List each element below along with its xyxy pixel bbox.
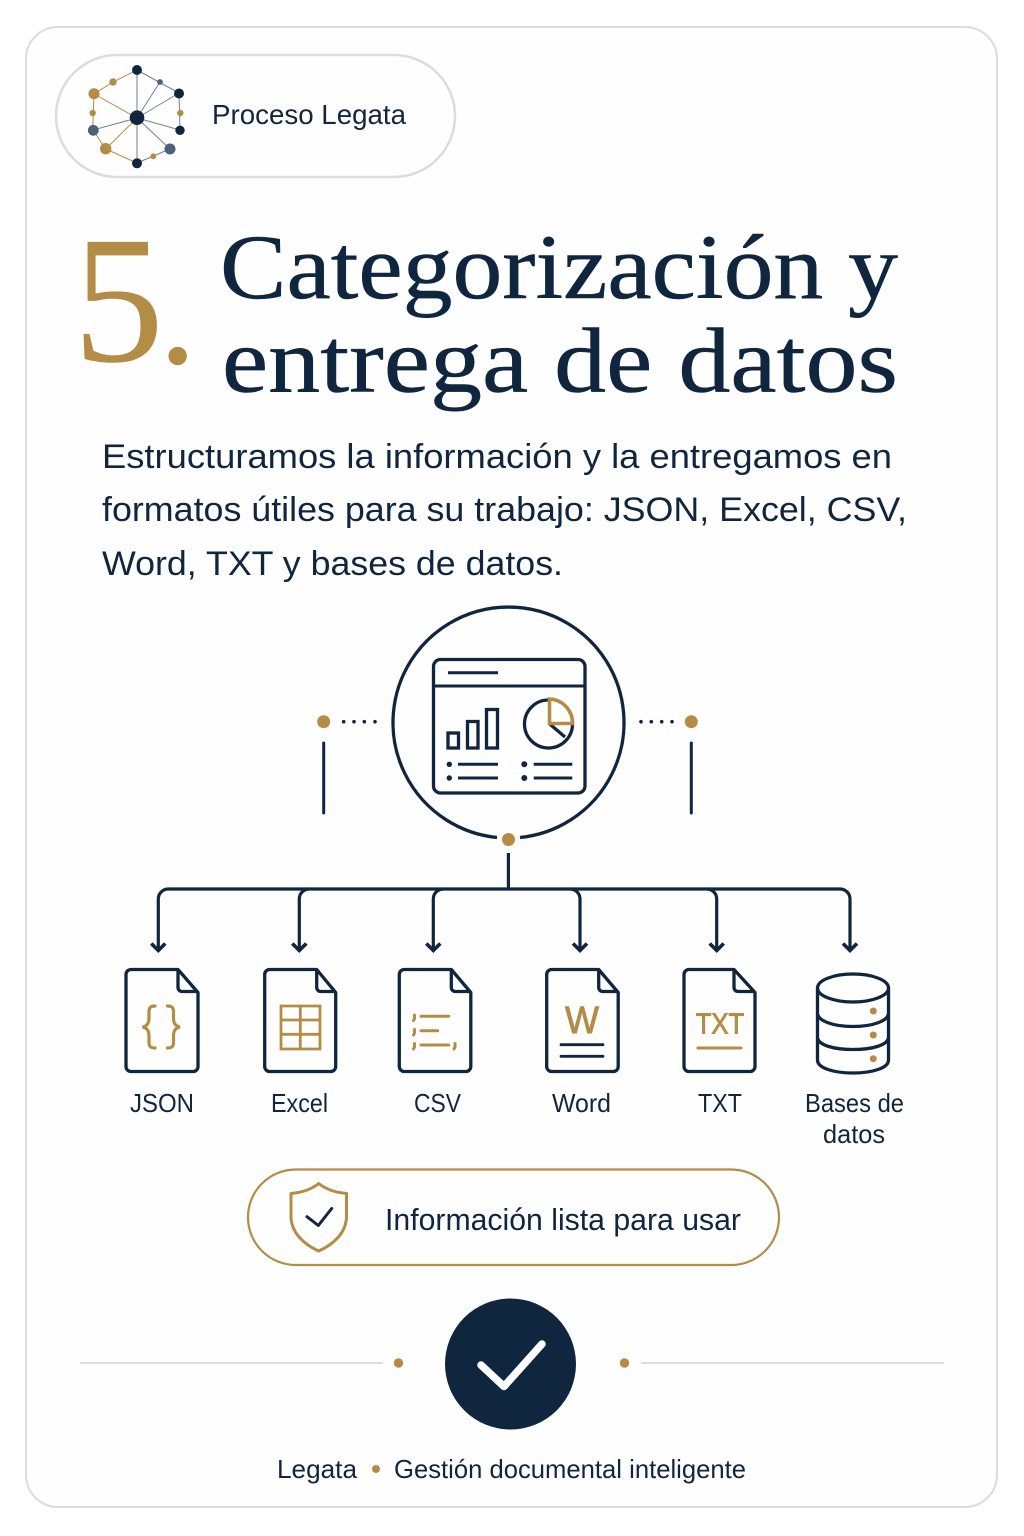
diagram: dashboard hub xyxy=(393,607,624,846)
title: Categorización y xyxy=(220,216,898,318)
icon: check badge xyxy=(445,1298,576,1430)
intro text xyxy=(102,438,907,583)
format: Word: Word xyxy=(552,1088,611,1118)
format: Excel xyxy=(265,970,336,1118)
title: entrega de datos xyxy=(222,310,898,412)
left connector xyxy=(317,715,377,813)
icon: shield check xyxy=(291,1184,346,1251)
format: Bases de datos xyxy=(805,974,904,1149)
arrows: branch to formats xyxy=(151,853,857,950)
circle outline xyxy=(393,607,624,838)
format: TXT: TXT xyxy=(698,1088,742,1118)
format: CSV xyxy=(399,970,471,1118)
badge text: Proceso Legata xyxy=(212,99,406,130)
format: JSON xyxy=(126,970,198,1118)
callout: Información lista para usar: Información lista para usar xyxy=(385,1202,741,1237)
intro text: Estructuramos la información y la entregamos en xyxy=(102,438,892,476)
format: Word xyxy=(547,970,618,1118)
right connector xyxy=(639,715,698,813)
format: Excel: Excel xyxy=(271,1088,328,1118)
format: Bases de datos: Bases de xyxy=(805,1088,904,1118)
format: Bases de datos: datos xyxy=(823,1119,885,1149)
badge: Proceso Legata xyxy=(56,55,455,177)
intro text: formatos útiles para su trabajo: JSON, Excel, CSV, xyxy=(102,491,907,529)
format: JSON: JSON xyxy=(130,1088,194,1118)
step number: . xyxy=(158,225,197,397)
divider with check badge xyxy=(80,1298,944,1430)
icon: network logo xyxy=(88,65,185,168)
callout: Información lista para usar xyxy=(248,1170,779,1265)
format: TXT xyxy=(684,970,755,1118)
format: Word: W xyxy=(565,1000,599,1042)
title xyxy=(220,216,898,412)
footer: Legata xyxy=(277,1454,358,1484)
format: TXT: TXT xyxy=(696,1008,744,1040)
intro text: Word, TXT y bases de datos. xyxy=(102,545,563,583)
footer: Gestión documental inteligente xyxy=(394,1454,746,1484)
icon: dashboard xyxy=(434,660,585,793)
format: CSV: CSV xyxy=(414,1088,462,1118)
step number: 5 xyxy=(73,200,164,401)
